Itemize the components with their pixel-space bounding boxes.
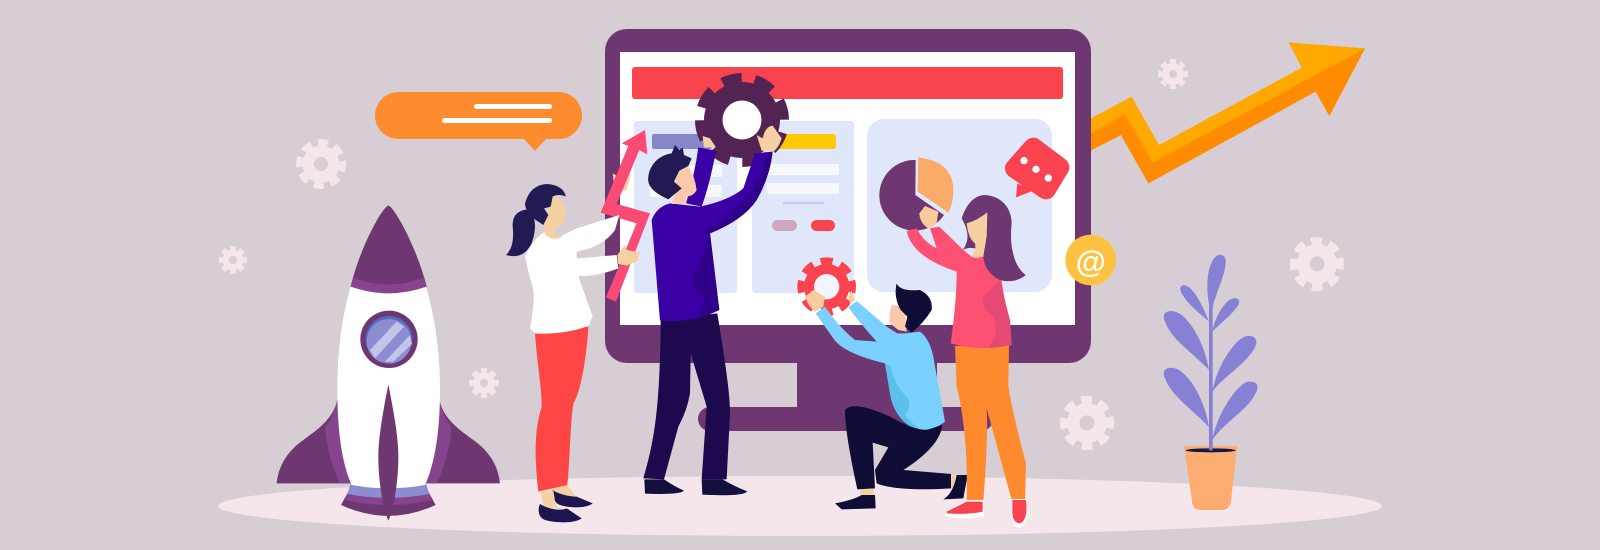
speech bubble orange [375, 92, 582, 151]
face [672, 167, 697, 204]
head [889, 305, 907, 332]
gear: pale top right [1160, 61, 1186, 87]
upper hand [613, 170, 631, 192]
gear: pale left [300, 142, 342, 186]
trousers [845, 406, 952, 489]
pink zigzag arrow [601, 130, 650, 302]
person: man lifting gear [643, 126, 782, 495]
hair [648, 145, 692, 199]
panel: left card [634, 121, 737, 293]
big dark gear [700, 78, 784, 162]
at-sign badge: @ [1076, 244, 1106, 279]
pot [1184, 446, 1237, 510]
person: kneeling man [801, 261, 968, 509]
hands [805, 290, 825, 312]
orange trousers [955, 345, 1026, 502]
monitor [605, 29, 1091, 431]
panel: middle card [752, 121, 854, 293]
shoes [945, 500, 984, 519]
hair [896, 283, 932, 333]
feet [860, 489, 875, 497]
gear: pale right [1294, 241, 1340, 287]
rocket [277, 206, 500, 521]
nose cone [351, 206, 427, 287]
skin [543, 196, 566, 239]
face [967, 212, 987, 258]
porthole [360, 311, 418, 368]
header bar [632, 67, 1063, 99]
plant [1164, 255, 1258, 510]
center fin [378, 384, 398, 521]
white top [525, 215, 619, 334]
ground ellipse [218, 476, 1382, 536]
sweater [652, 152, 773, 321]
person: woman with pie [907, 195, 1028, 528]
back arm [686, 147, 716, 207]
hair [525, 184, 566, 225]
gear: pale lower right [1064, 400, 1110, 446]
chat bubble red [1015, 148, 1059, 197]
red pants [535, 327, 588, 492]
leaves [1164, 255, 1258, 440]
monitor frame [605, 29, 1091, 363]
person: woman with arrow [506, 130, 650, 522]
hair [962, 195, 1026, 281]
growth arrow [1087, 42, 1365, 183]
shoes [644, 479, 684, 494]
red gear [801, 261, 852, 312]
panel: right card [867, 119, 1052, 292]
pie chart [879, 157, 953, 231]
trousers [643, 313, 730, 479]
soil [1186, 448, 1236, 452]
pink shirt [907, 227, 1012, 348]
hand [919, 206, 938, 228]
monitor stand [698, 350, 993, 431]
hands [703, 136, 716, 147]
shoes [553, 485, 577, 497]
stem [1209, 307, 1213, 450]
lower hand [617, 245, 641, 266]
body [337, 287, 440, 488]
sweater [816, 301, 945, 430]
nozzle [341, 492, 436, 516]
fins [277, 400, 350, 483]
at-sign badge [1065, 235, 1116, 285]
gear: pale near rocket [471, 370, 497, 396]
screen [620, 52, 1075, 325]
gear: pale small left [221, 248, 245, 272]
